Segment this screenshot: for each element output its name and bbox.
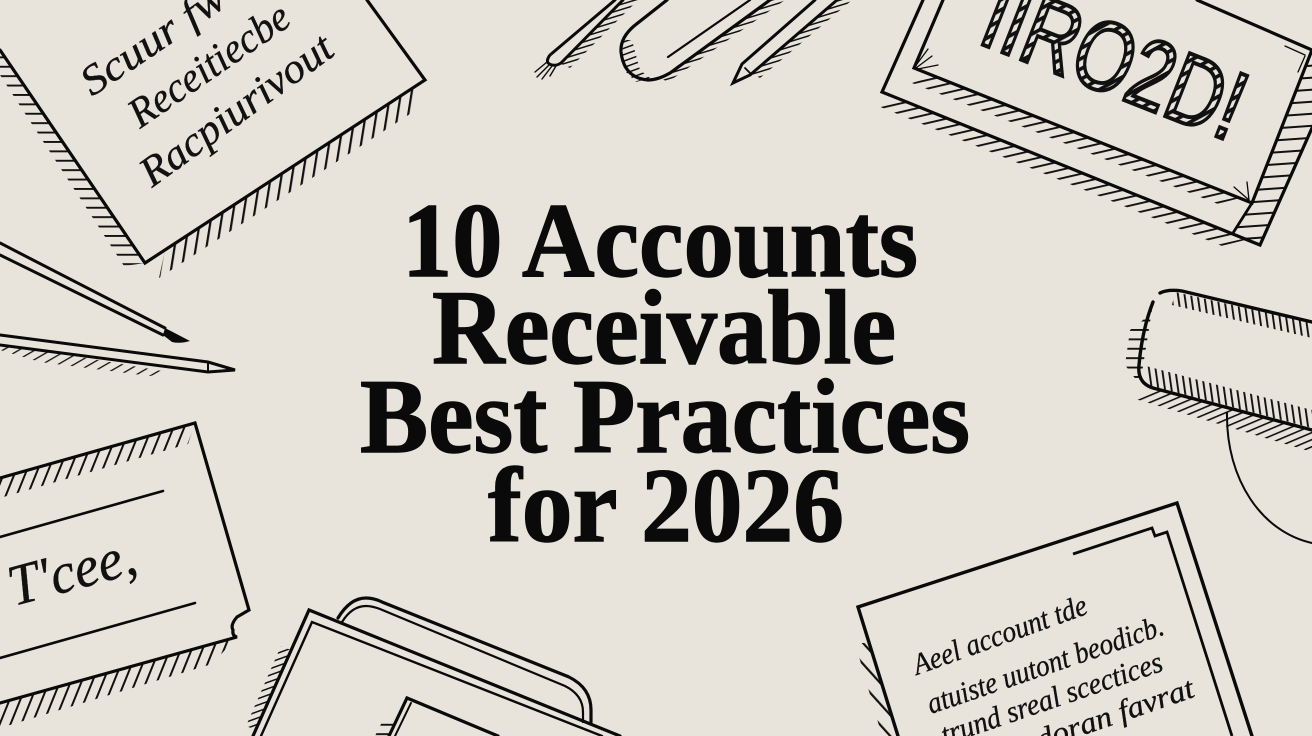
card handwriting xyxy=(72,0,343,197)
title: 10 Accounts xyxy=(402,182,918,299)
title xyxy=(360,182,970,564)
illustration: eraser, right xyxy=(1125,290,1312,543)
illustration: pencil, lower xyxy=(0,335,235,376)
illustration: ticket card, bottom left xyxy=(0,423,249,728)
illustration: document page, bottom right xyxy=(855,503,1252,736)
ticket handwriting: T'cee, xyxy=(1,522,143,619)
illustration: folder, bottom centre xyxy=(246,598,620,736)
illustration: pencil, upper xyxy=(0,243,190,343)
document handwriting: atuiste uutont beodicb. xyxy=(923,609,1168,721)
illustration: stamped card, top right xyxy=(878,0,1312,246)
card handwriting: Racpiurivout xyxy=(130,24,343,197)
illustration: paper clips and pencils, top centre xyxy=(535,0,852,83)
title: Best Practices xyxy=(360,358,970,475)
title: for 2026 xyxy=(488,447,844,564)
title: Receivable xyxy=(432,269,896,386)
document handwriting: Aeel account tde xyxy=(907,589,1092,682)
illustration: handwritten note card, top left xyxy=(0,0,425,278)
